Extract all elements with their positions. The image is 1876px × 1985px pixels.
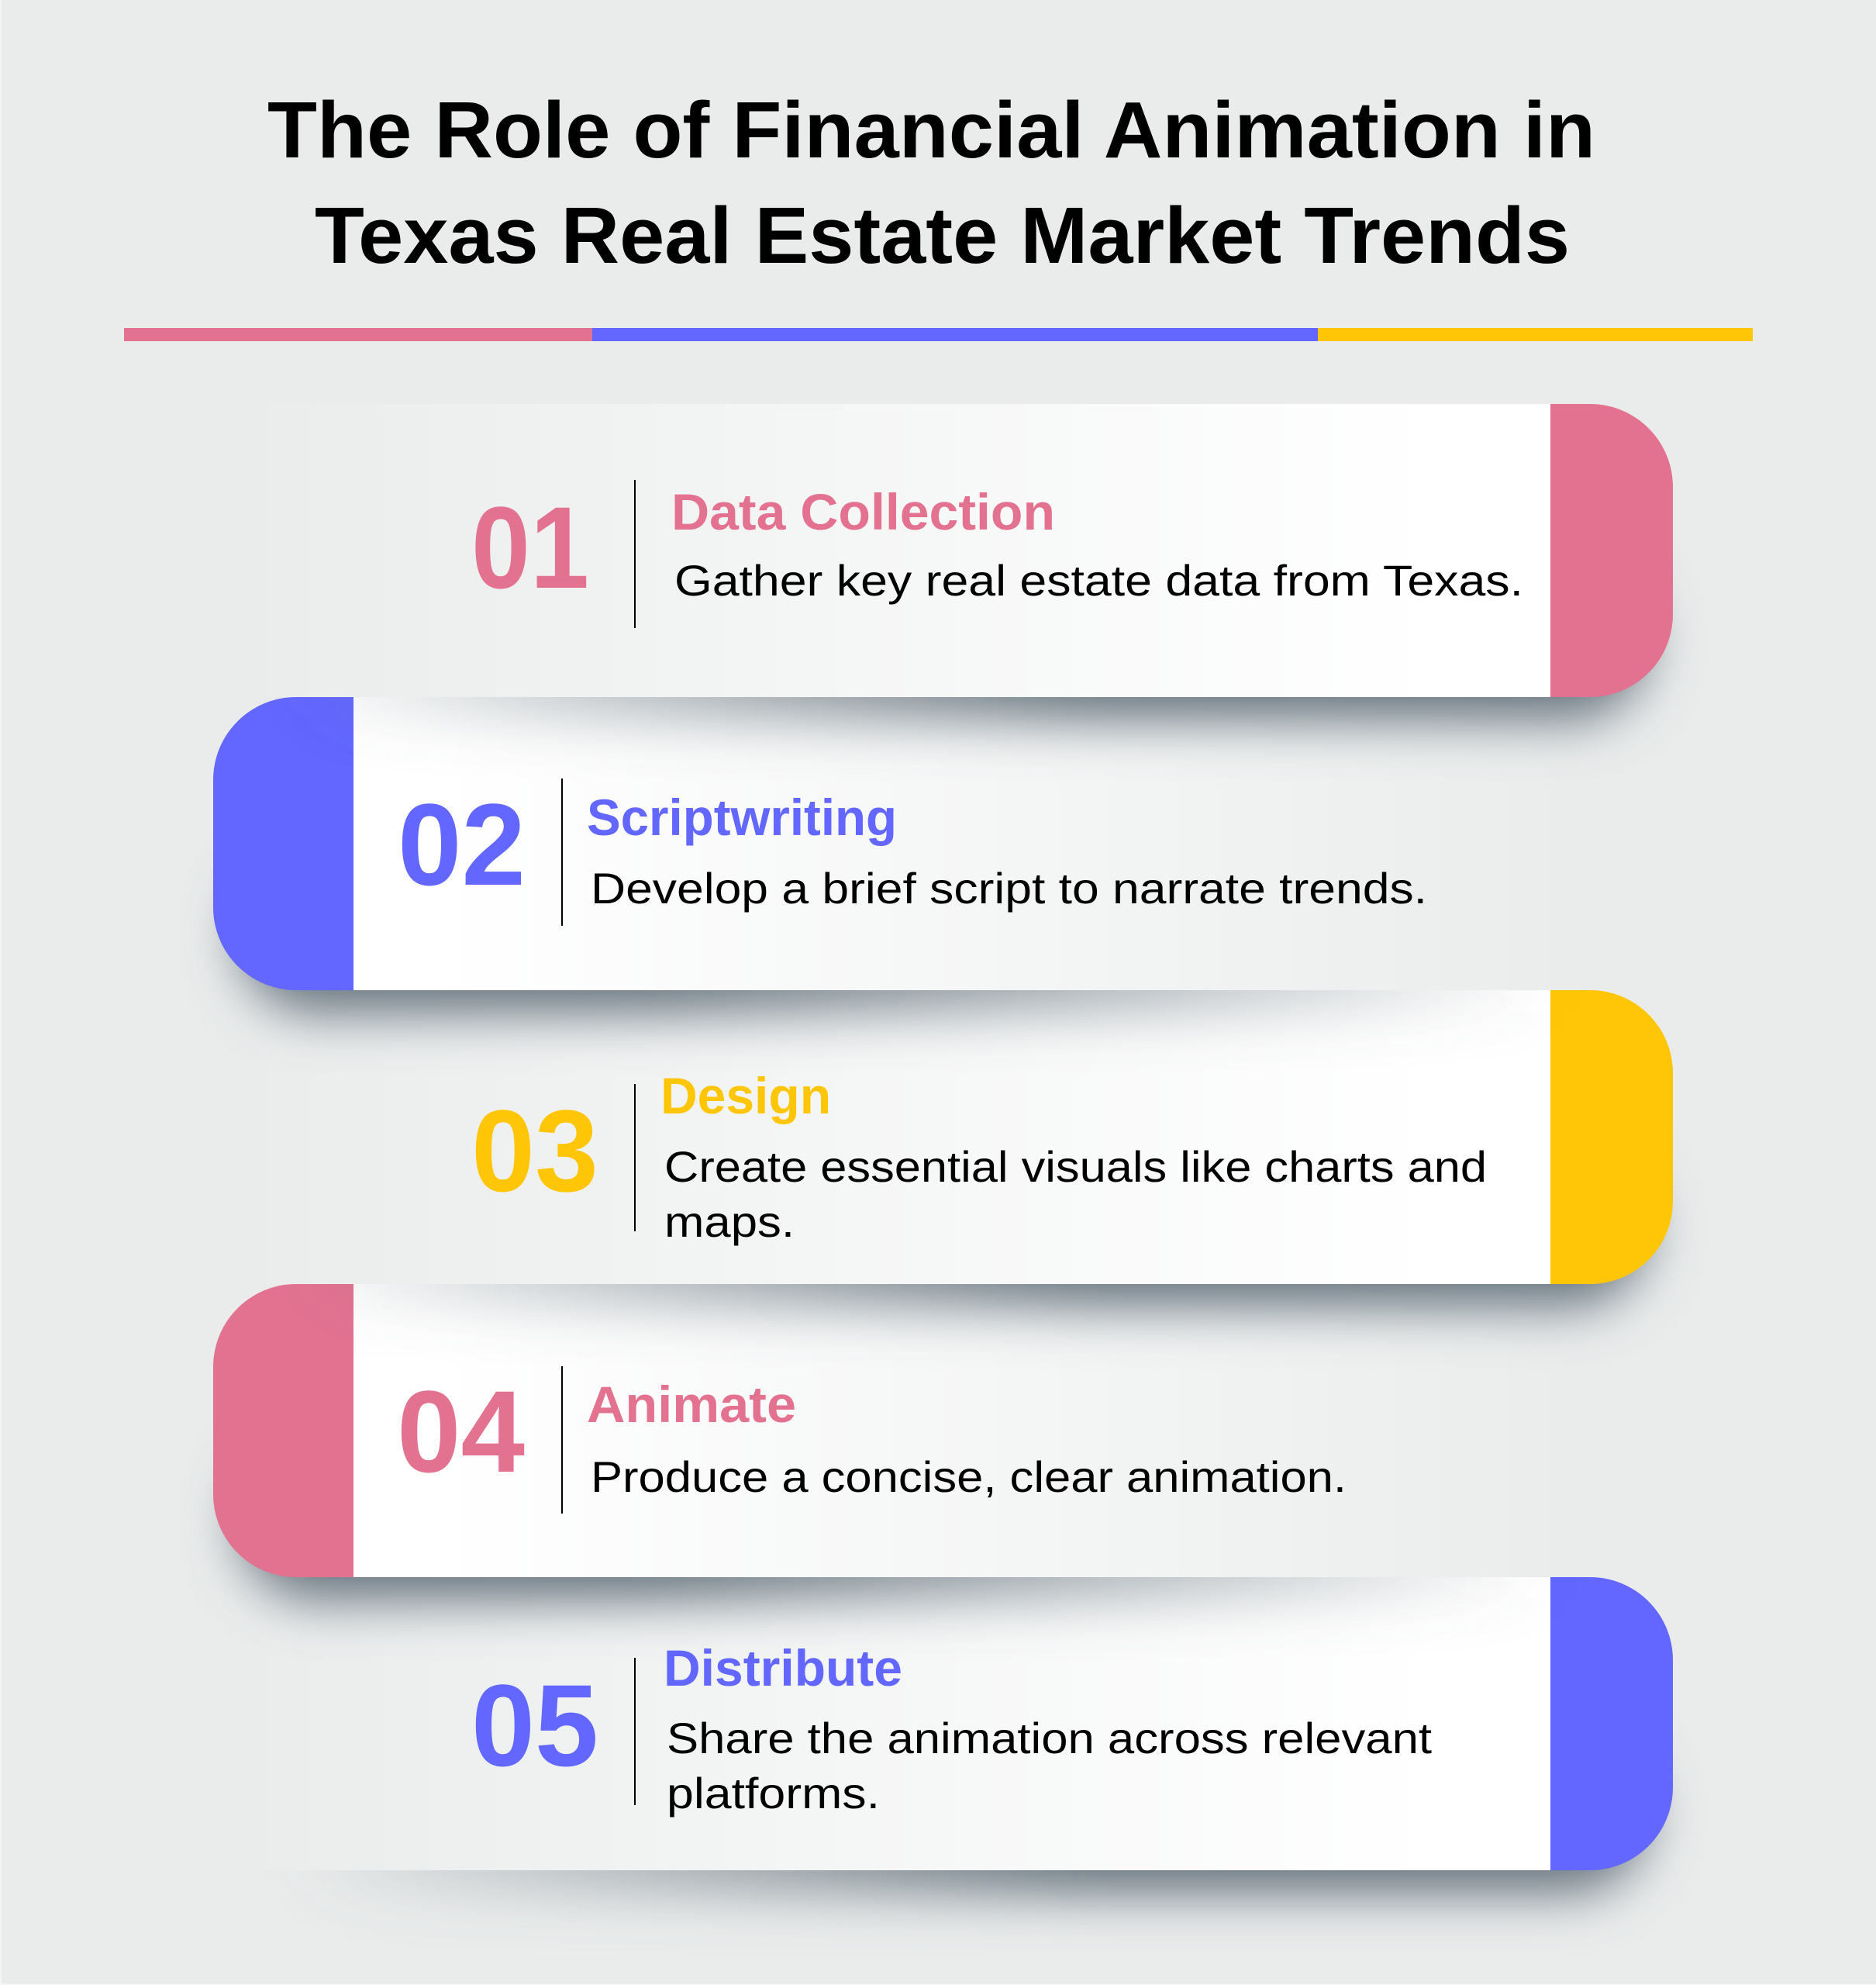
number 02: 02 [398, 779, 526, 910]
description: Share the animation across relevant [667, 1714, 1432, 1762]
title [267, 85, 1595, 280]
title: Texas Real Estate Market Trends [315, 191, 1570, 280]
separator [561, 778, 563, 926]
description: platforms. [667, 1769, 880, 1818]
number 03: 03 [471, 1086, 598, 1216]
title: The Role of Financial Animation in [267, 85, 1595, 174]
heading: Distribute: Distribute [664, 1639, 902, 1697]
description: maps. [664, 1197, 795, 1246]
panel: step 01 Data Collection [233, 404, 1673, 719]
heading: Design: Design [660, 1067, 831, 1124]
heading: Scriptwriting: Scriptwriting [587, 789, 897, 846]
cap: step 03 [1550, 990, 1673, 1284]
number 01: 01 [471, 482, 589, 613]
description: Produce a concise, clear animation. [591, 1452, 1347, 1501]
description: Create essential visuals like charts and [664, 1142, 1487, 1191]
panel: step 03 Design [233, 990, 1673, 1306]
description [667, 1714, 1432, 1818]
cap: step 01 [1550, 404, 1673, 697]
cap: step 02 [213, 697, 353, 990]
description: Gather key real estate data from Texas. [674, 556, 1523, 605]
panel: step 04 Animate [213, 1284, 1615, 1599]
cap: step 05 [1550, 1577, 1673, 1870]
number 04: 04 [397, 1366, 525, 1497]
description: Develop a brief script to narrate trends. [591, 864, 1427, 913]
description [664, 1142, 1487, 1246]
number 05: 05 [471, 1660, 598, 1790]
heading: Data Collection: Data Collection [671, 483, 1055, 540]
separator [634, 480, 636, 628]
separator [634, 1658, 636, 1805]
panel: step 05 Distribute [233, 1577, 1673, 1892]
separator [561, 1366, 563, 1514]
heading: Animate: Animate [587, 1376, 796, 1433]
cap: step 04 [213, 1284, 353, 1577]
tri-colour divider [124, 328, 1753, 341]
separator [634, 1084, 636, 1231]
panel: step 02 Scriptwriting [213, 697, 1615, 1012]
